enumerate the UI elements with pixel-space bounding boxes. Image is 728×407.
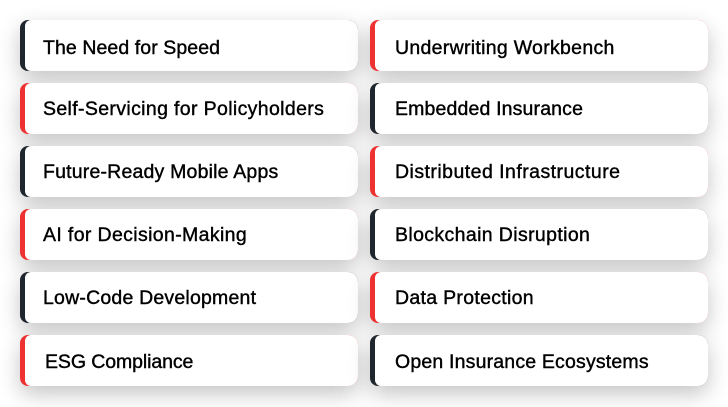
card: Self-Servicing for Policyholders xyxy=(20,83,358,134)
card: Embedded Insurance: Embedded Insurance xyxy=(395,98,583,120)
card: Embedded Insurance xyxy=(370,83,708,134)
card: Future-Ready Mobile Apps: Future-Ready Mobile Apps xyxy=(43,161,278,183)
card: Blockchain Disruption: Blockchain Disruption xyxy=(395,224,590,246)
card: Self-Servicing for Policyholders: Self-Servicing for Policyholders xyxy=(43,98,324,120)
card: Distributed Infrastructure xyxy=(370,146,708,197)
card: Open Insurance Ecosystems: Open Insurance Ecosystems xyxy=(395,351,649,373)
card: Low-Code Development xyxy=(20,272,358,323)
card: ESG Compliance: ESG Compliance xyxy=(45,351,193,373)
card: Underwriting Workbench: Underwriting Workbench xyxy=(395,37,615,59)
card: Data Protection: Data Protection xyxy=(395,287,534,309)
card: Low-Code Development: Low-Code Development xyxy=(43,287,256,309)
card: Future-Ready Mobile Apps xyxy=(20,146,358,197)
card: The Need for Speed: The Need for Speed xyxy=(43,37,220,59)
card: Open Insurance Ecosystems xyxy=(370,335,708,386)
card: Underwriting Workbench xyxy=(370,20,708,71)
card: The Need for Speed xyxy=(20,20,358,71)
card: Blockchain Disruption xyxy=(370,209,708,260)
card: AI for Decision-Making xyxy=(20,209,358,260)
card: Data Protection xyxy=(370,272,708,323)
card: ESG Compliance xyxy=(20,335,358,386)
card: Distributed Infrastructure: Distributed Infrastructure xyxy=(395,161,620,183)
card: AI for Decision-Making: AI for Decision-Making xyxy=(43,224,247,246)
